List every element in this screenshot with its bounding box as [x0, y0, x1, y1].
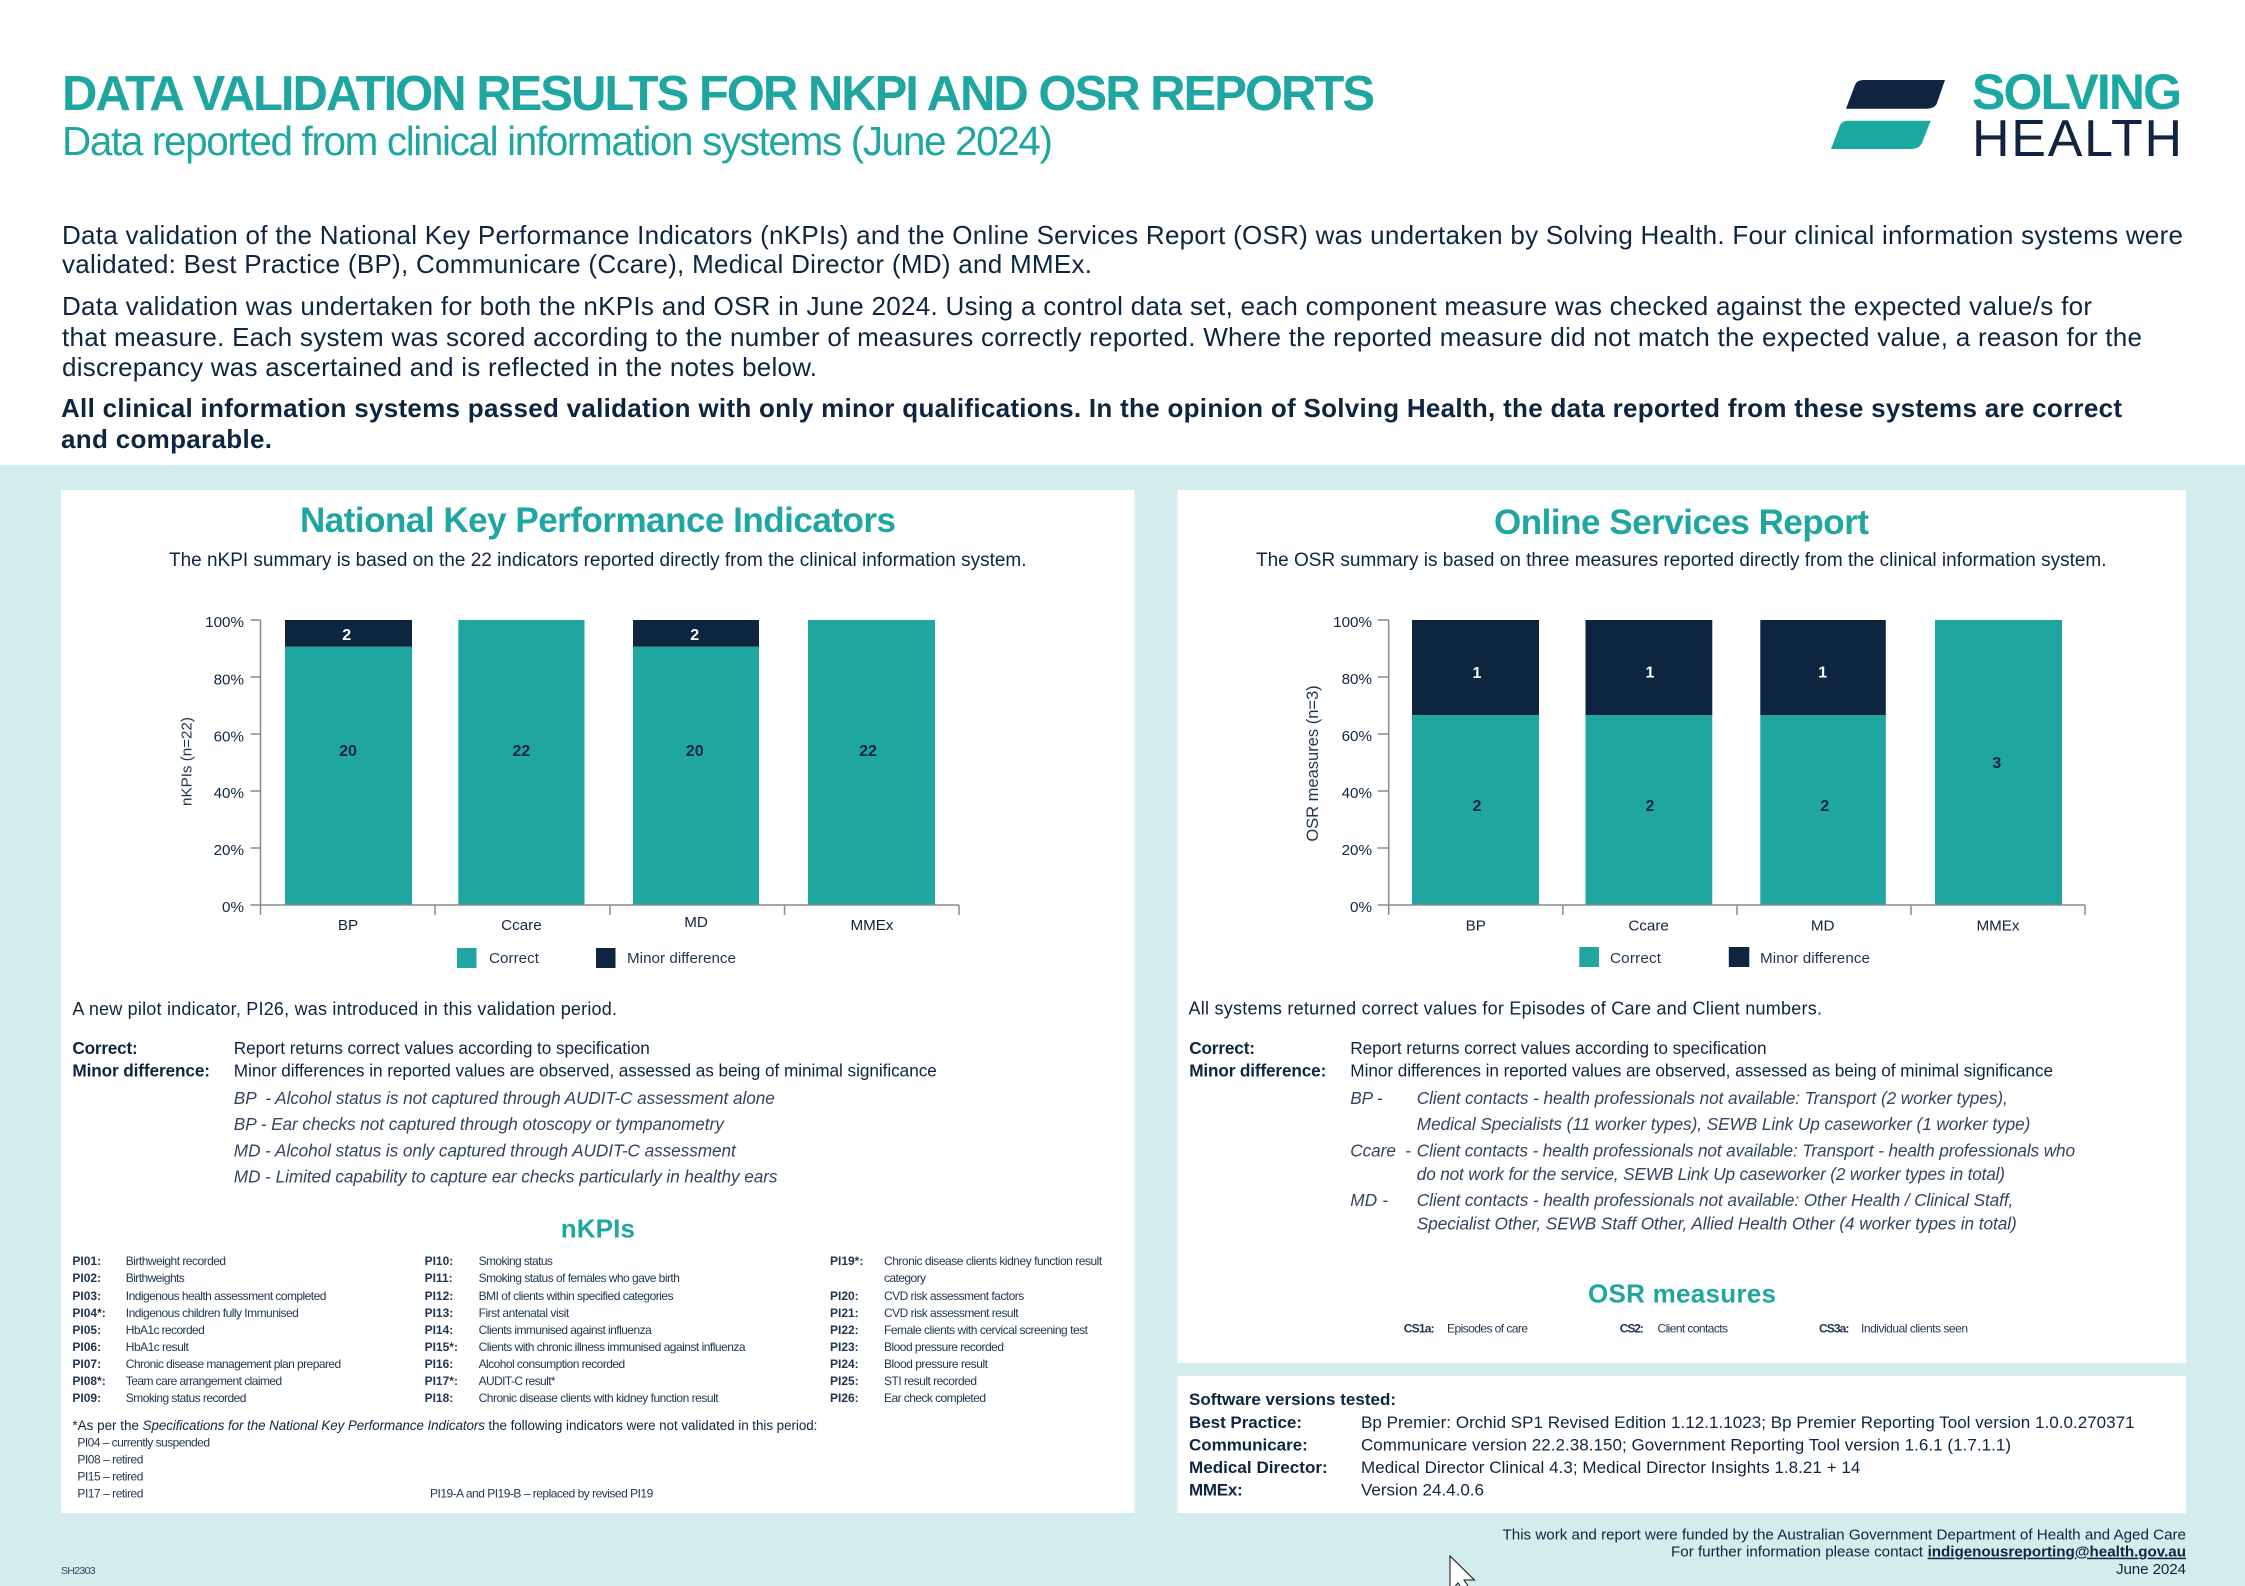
panel: National Key Performance Indicators	[61, 490, 1134, 1513]
logo: Solving Health: SOLVING	[1972, 64, 2182, 120]
footer: funding and contact: This work and report were funded by the Australian Government Department of Health and Aged Care	[1502, 1526, 2186, 1543]
footer: funding and contact: indigenousreporting@health.gov.au	[1928, 1544, 2186, 1561]
notes: minor differences by system: Ccare -	[1350, 1141, 1411, 1161]
stacked bar chart: OSR: 20%	[1342, 842, 1372, 859]
footer: funding and contact: June 2024	[2116, 1561, 2186, 1578]
OSR summary sentence: The OSR summary is based on three measures reported directly from the clinical information system.	[1256, 550, 2106, 571]
list: nKPIs column 2: PI12:	[425, 1289, 453, 1303]
intro paragraph 2	[62, 291, 2142, 382]
list: OSR measures: Individual clients seen	[1861, 1322, 1968, 1336]
document code: SH2303	[61, 1565, 96, 1577]
list: nKPIs column 1: PI09:	[72, 1391, 101, 1405]
list: nKPIs column 3: PI23:	[830, 1340, 859, 1354]
title: DATA VALIDATION RESULTS FOR NKPI AND OSR REPORTS	[62, 67, 1375, 121]
intro conclusion in bold: and comparable.	[61, 424, 272, 454]
icon: mouse cursor	[1450, 1556, 1474, 1586]
list: nKPIs column 3: category	[884, 1271, 926, 1285]
notes: minor differences by system	[234, 1088, 778, 1187]
stacked bar chart: OSR: 3	[1992, 755, 2001, 772]
list: software versions by system: Medical Director Clinical 4.3; Medical Director Insights 1.8.21 + 14	[1361, 1458, 1860, 1477]
heading: nKPI panel: National Key Performance Indicators	[300, 501, 896, 540]
stacked bar chart: nKPIs: 22	[513, 743, 530, 760]
notes: minor differences by system	[1350, 1088, 2075, 1233]
list: software versions by system: Version 24.4.0.6	[1361, 1481, 1484, 1500]
stacked bar chart: nKPIs: nKPIs (n=22)	[178, 717, 196, 806]
footnote: indicators not validated: PI19-A and PI19-B – replaced by revised PI19	[430, 1487, 654, 1501]
list: nKPIs column 1: Indigenous children fully Immunised	[126, 1306, 299, 1320]
list: nKPIs column 1: PI06:	[72, 1340, 101, 1354]
list: nKPIs column 3: CVD risk assessment factors	[884, 1289, 1024, 1303]
notes: minor differences by system: do not work for the service, SEWB Link Up caseworker (2 worker types in total)	[1417, 1164, 2005, 1184]
list: nKPIs column 2: Chronic disease clients with kidney function result	[479, 1391, 719, 1405]
definitions: correct and minor difference: Report returns correct values according to specification	[1350, 1038, 1766, 1058]
list: nKPIs column 2: Alcohol consumption recorded	[479, 1357, 625, 1371]
list: software versions by system: Bp Premier: Orchid SP1 Revised Edition 1.12.1.1023; Bp Premier Reporting Tool version 1.0.0.270371	[1361, 1413, 2135, 1432]
panel: software versions tested	[1178, 1376, 2186, 1513]
notes: minor differences by system: Client contacts - health professionals not available: Transport - health professionals who	[1417, 1141, 2075, 1161]
definitions: correct and minor difference: Correct:	[1189, 1038, 1255, 1058]
stacked bar chart: OSR: MMEx	[1976, 918, 2020, 935]
list: nKPIs column 3: PI24:	[830, 1357, 859, 1371]
list: nKPIs column 2: PI11:	[425, 1271, 453, 1285]
list: nKPIs column 3: Female clients with cervical screening test	[884, 1323, 1089, 1337]
stacked bar chart: OSR: 1	[1646, 665, 1655, 682]
list: nKPIs column 1: PI08*:	[72, 1374, 106, 1388]
stacked bar chart: nKPIs: 0%	[222, 899, 244, 916]
panel: Online Services Report	[1178, 490, 2186, 1363]
stacked bar chart: nKPIs: 80%	[214, 672, 244, 688]
list: nKPIs column 3: PI22:	[830, 1323, 859, 1337]
notes: minor differences by system: Medical Specialists (11 worker types), SEWB Link Up caseworker (1 worker type)	[1417, 1114, 2030, 1134]
stacked bar chart: OSR: 2	[1473, 798, 1482, 815]
heading: OSR measures list: OSR measures	[1588, 1279, 1776, 1309]
footnote: indicators not validated: PI04 – currently suspended	[77, 1436, 210, 1450]
list: nKPIs column 1: PI05:	[72, 1323, 101, 1337]
stacked bar chart: OSR: 60%	[1342, 728, 1372, 745]
stacked bar chart: OSR: 80%	[1342, 671, 1372, 688]
note: correct values for episodes and clients: All systems returned correct values for Episodes of Care and Client numbers.	[1188, 999, 1822, 1019]
definitions: correct and minor difference	[72, 1038, 937, 1080]
list: nKPIs column 1: PI02:	[72, 1271, 101, 1285]
stacked bar chart: OSR: 40%	[1342, 785, 1372, 802]
stacked bar chart: nKPIs: MD	[684, 914, 708, 931]
list: nKPIs column 3: PI21:	[830, 1306, 859, 1320]
note: pilot indicator: A new pilot indicator, PI26, was introduced in this validation period.	[72, 999, 617, 1019]
stacked bar chart: nKPIs: 20	[686, 743, 704, 760]
stacked bar chart: OSR: 0%	[1350, 899, 1372, 916]
intro paragraph 1: validated: Best Practice (BP), Communicare (Ccare), Medical Director (MD) and MMEx.	[62, 249, 1092, 279]
stacked bar chart: nKPIs: BP	[338, 917, 358, 934]
heading: OSR panel: Online Services Report	[1494, 503, 1869, 542]
list: nKPIs column 1: PI07:	[72, 1357, 101, 1371]
list: nKPIs column 3: PI19*:	[830, 1254, 863, 1268]
stacked bar chart: OSR: 2	[1820, 798, 1829, 815]
list: software versions by system: Communicare:	[1189, 1435, 1308, 1454]
list: nKPIs column 1: Birthweight recorded	[126, 1254, 226, 1268]
intro conclusion in bold: All clinical information systems passed validation with only minor qualifications. In the opinion of Solving Health, the data reported from these systems are correct	[61, 393, 2122, 423]
intro paragraph 2: that measure. Each system was scored according to the number of measures correctly reported. Where the reported measure did not match the expected value, a reason for the	[62, 322, 2142, 352]
list: nKPIs column 3: PI20:	[830, 1289, 859, 1303]
footnote: indicators not validated: PI17 – retired	[77, 1487, 143, 1501]
list: nKPIs column 3: CVD risk assessment result	[884, 1306, 1019, 1320]
footnote: indicators not validated: PI08 – retired	[77, 1453, 143, 1467]
stacked bar chart: nKPIs	[178, 614, 959, 968]
list: nKPIs column 3: PI26:	[830, 1391, 859, 1405]
definitions: correct and minor difference: Minor differences in reported values are observed, assessed as being of minimal significance	[1350, 1061, 2053, 1081]
stacked bar chart: nKPIs: 20%	[214, 842, 244, 859]
heading: nKPIs list: nKPIs	[561, 1213, 635, 1243]
heading: software versions: Software versions tested:	[1189, 1390, 1396, 1409]
stacked bar chart: OSR: 1	[1818, 665, 1827, 682]
list: nKPIs column 2: BMI of clients within specified categories	[479, 1289, 674, 1303]
intro paragraph 2: Data validation was undertaken for both the nKPIs and OSR in June 2024. Using a control data set, each component measure was checked against the expected value/s for	[62, 291, 2092, 321]
list: nKPIs column 1: HbA1c result	[126, 1340, 189, 1354]
list: nKPIs column 3: Blood pressure result	[884, 1357, 989, 1371]
list: software versions by system: MMEx:	[1189, 1481, 1243, 1500]
stacked bar chart: OSR: Ccare	[1628, 918, 1669, 935]
notes: minor differences by system: BP - Ear checks not captured through otoscopy or tympanometry	[234, 1114, 725, 1134]
list: OSR measures: CS2:	[1620, 1322, 1644, 1336]
stacked bar chart: nKPIs: 2	[342, 627, 351, 644]
stacked bar chart: nKPIs: Ccare	[501, 917, 542, 934]
list: nKPIs column 2: PI16:	[425, 1357, 453, 1371]
stacked bar chart: nKPIs: 20	[339, 743, 357, 760]
definitions: correct and minor difference	[1189, 1038, 2053, 1081]
notes: minor differences by system: BP - Alcohol status is not captured through AUDIT-C assessment alone	[234, 1088, 775, 1108]
notes: minor differences by system: Client contacts - health professionals not available: Transport (2 worker types),	[1417, 1088, 2008, 1108]
list: nKPIs column 1: PI04*:	[72, 1306, 106, 1320]
list: software versions by system: Medical Director:	[1189, 1458, 1328, 1477]
stacked bar chart: OSR: 100%	[1333, 614, 1372, 631]
stacked bar chart: nKPIs: 100%	[205, 614, 244, 631]
intro paragraph 1: Data validation of the National Key Performance Indicators (nKPIs) and the Online Services Report (OSR) was undertaken by Solving Health. Four clinical information systems were	[62, 220, 2183, 250]
list: software versions by system	[1189, 1413, 2135, 1500]
stacked bar chart: nKPIs: Minor difference	[627, 950, 736, 967]
list: nKPIs column 3	[830, 1254, 1103, 1405]
list: nKPIs column 1	[72, 1254, 341, 1405]
notes: minor differences by system: Specialist Other, SEWB Staff Other, Allied Health Other (4 worker types in total)	[1417, 1213, 2017, 1233]
footnote: indicators not validated: Specifications for the National Key Performance Indicators	[143, 1418, 485, 1433]
list: nKPIs column 1: Chronic disease management plan prepared	[126, 1357, 341, 1371]
list: nKPIs column 2: PI14:	[425, 1323, 453, 1337]
list: nKPIs column 2: Smoking status	[479, 1254, 553, 1268]
list: nKPIs column 1: PI03:	[72, 1289, 101, 1303]
notes: minor differences by system: MD - Alcohol status is only captured through AUDIT-C assessment	[234, 1141, 737, 1161]
definitions: correct and minor difference: Report returns correct values according to specification	[234, 1038, 650, 1058]
list: nKPIs column 3: Chronic disease clients kidney function result	[884, 1254, 1103, 1268]
notes: minor differences by system: Client contacts - health professionals not available: Other Health / Clinical Staff,	[1417, 1190, 2013, 1210]
notes: minor differences by system: MD -	[1350, 1190, 1388, 1210]
footnote: indicators not validated: *As per the	[72, 1418, 139, 1433]
list: nKPIs column 1: Smoking status recorded	[126, 1391, 246, 1405]
stacked bar chart: OSR: Correct	[1610, 950, 1662, 967]
list: nKPIs column 1: Indigenous health assessment completed	[126, 1289, 326, 1303]
list: OSR measures: CS3a:	[1819, 1322, 1849, 1336]
intro paragraph 1	[62, 220, 2183, 279]
list: nKPIs column 2: PI10:	[425, 1254, 453, 1268]
list: nKPIs column 2: PI18:	[425, 1391, 453, 1405]
notes: minor differences by system: BP -	[1350, 1088, 1383, 1108]
stacked bar chart: OSR: MD	[1811, 918, 1835, 935]
intro paragraph 2: discrepancy was ascertained and is reflected in the notes below.	[62, 352, 817, 382]
list: nKPIs column 1: Team care arrangement claimed	[126, 1374, 282, 1388]
list: nKPIs column 1: PI01:	[72, 1254, 101, 1268]
list: OSR measures	[1404, 1322, 1968, 1336]
nKPI summary sentence: The nKPI summary is based on the 22 indicators reported directly from the clinical information system.	[169, 550, 1026, 571]
stacked bar chart: nKPIs: 40%	[214, 785, 244, 802]
definitions: correct and minor difference: Minor difference:	[72, 1060, 210, 1080]
footer: funding and contact: For further information please contact	[1671, 1544, 1924, 1561]
list: nKPIs column 2: PI15*:	[425, 1340, 458, 1354]
stacked bar chart: nKPIs: 2	[690, 627, 699, 644]
footer: funding and contact	[1502, 1526, 2186, 1578]
stacked bar chart: nKPIs: 60%	[214, 728, 244, 746]
list: nKPIs column 2: First antenatal visit	[479, 1306, 570, 1320]
definitions: correct and minor difference: Minor difference:	[1189, 1061, 1326, 1081]
stacked bar chart: OSR: Minor difference	[1760, 950, 1870, 967]
list: nKPIs column 3: Ear check completed	[884, 1391, 986, 1405]
stacked bar chart: nKPIs: 22	[859, 743, 877, 760]
footnote: indicators not validated	[72, 1418, 817, 1501]
list: nKPIs column 2: Smoking status of females who gave birth	[479, 1271, 680, 1285]
list: nKPIs column 2: PI13:	[425, 1306, 453, 1320]
list: nKPIs column 2: Clients with chronic illness immunised against influenza	[479, 1340, 746, 1354]
list: software versions by system: Best Practice:	[1189, 1413, 1302, 1432]
subtitle: Data reported from clinical information systems (June 2024)	[62, 118, 1053, 164]
stacked bar chart: OSR	[1304, 614, 2085, 967]
list: nKPIs column 2: Clients immunised against influenza	[479, 1323, 652, 1337]
logo: Solving Health	[1831, 64, 2182, 168]
list: OSR measures: Episodes of care	[1447, 1322, 1528, 1336]
stacked bar chart: OSR: BP	[1466, 918, 1486, 935]
stacked bar chart: OSR: 1	[1473, 665, 1482, 682]
list: nKPIs column 3: STI result recorded	[884, 1374, 977, 1388]
list: nKPIs column 1: HbA1c recorded	[126, 1323, 205, 1337]
list: nKPIs column 2: AUDIT-C result*	[479, 1374, 556, 1388]
notes: minor differences by system: MD - Limited capability to capture ear checks particularly in healthy ears	[234, 1167, 778, 1187]
intro conclusion in bold	[61, 393, 2122, 454]
list: nKPIs column 1: Birthweights	[126, 1271, 185, 1285]
list: nKPIs column 2	[425, 1254, 746, 1405]
stacked bar chart: OSR: OSR measures (n=3)	[1304, 685, 1322, 842]
list: nKPIs column 3: PI25:	[830, 1374, 859, 1388]
logo: Solving Health: HEALTH	[1972, 110, 2182, 168]
stacked bar chart: nKPIs: MMEx	[850, 917, 894, 934]
list: nKPIs column 2: PI17*:	[425, 1374, 458, 1388]
list: software versions by system: Communicare version 22.2.38.150; Government Reporting Tool version 1.6.1 (1.7.1.1)	[1361, 1435, 2011, 1454]
stacked bar chart: nKPIs: Correct	[489, 950, 540, 967]
footnote: indicators not validated: PI15 – retired	[77, 1470, 143, 1484]
list: nKPIs column 3: Blood pressure recorded	[884, 1340, 1004, 1354]
definitions: correct and minor difference: Minor differences in reported values are observed, assessed as being of minimal significance	[234, 1060, 937, 1080]
list: OSR measures: CS1a:	[1404, 1322, 1435, 1336]
footnote: indicators not validated: the following indicators were not validated in this period:	[488, 1418, 817, 1433]
list: OSR measures: Client contacts	[1658, 1322, 1728, 1336]
definitions: correct and minor difference: Correct:	[72, 1038, 138, 1058]
stacked bar chart: OSR: 2	[1646, 798, 1655, 815]
